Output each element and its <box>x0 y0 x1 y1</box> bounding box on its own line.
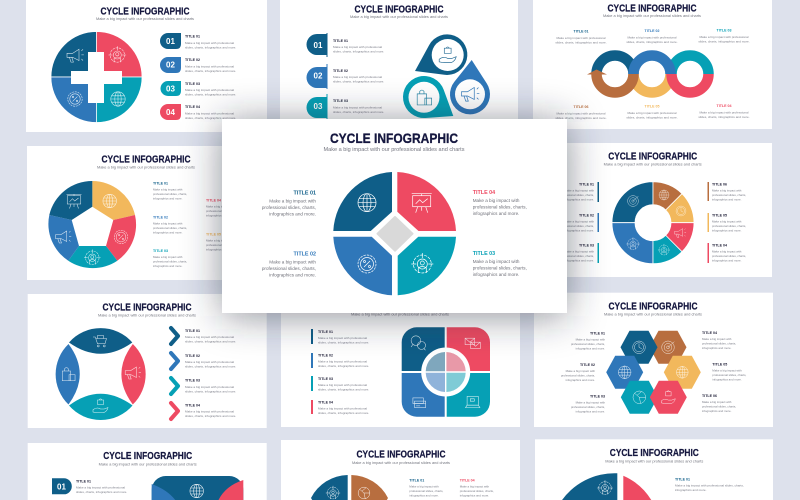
chart: pentagon ring <box>48 181 136 268</box>
list: square items: slides, charts, infographics and more. <box>318 388 369 392</box>
subtitle: bottom right: Make a big impact with our professional slides and charts <box>605 460 703 464</box>
list: plus cycle items: slides, charts, infographics and more. <box>185 92 236 96</box>
chart: interlinked rings <box>587 56 708 92</box>
list: hexagon right items: TITLE 05 <box>712 362 727 366</box>
list: plus cycle items: Make a big impact with professional <box>185 64 234 68</box>
subtitle: rounded square cycle: Make a big impact with our professional slides and charts <box>351 312 449 316</box>
list: donut left items: TITLE 02 <box>579 214 594 218</box>
list: plus cycle items: TITLE 02 <box>185 58 200 62</box>
list: pentagon items: Make a big impact with <box>206 238 236 242</box>
labels: rings top: TITLE 01 <box>574 30 588 34</box>
list item: title 01: TITLE 01 <box>675 478 690 482</box>
list: lens items with chevrons: TITLE 03 <box>185 378 200 382</box>
list: lens items with chevrons: slides, charts, infographics and more. <box>185 340 236 344</box>
list: lens items with chevrons: TITLE 01 <box>185 329 200 333</box>
panel: lens cycle slide <box>28 294 267 428</box>
chart: rounded petal shape <box>152 476 243 500</box>
list: teardrop items: 02 <box>314 72 323 80</box>
list: pentagon items: infographics and more. <box>206 248 236 252</box>
list: lens items with chevrons <box>171 328 236 419</box>
list: donut left items: professional slides, charts, <box>560 193 594 197</box>
list: plus cycle items: 02 <box>166 61 175 70</box>
list: hexagon right items: infographics and more. <box>712 378 742 382</box>
list: square items: TITLE 03 <box>318 377 333 381</box>
labels: rings top: Make a big impact with professional <box>627 36 677 40</box>
list item: title 01 <box>675 478 744 492</box>
list: pentagon items: infographics and more. <box>206 214 236 218</box>
icon: globe <box>358 194 376 212</box>
panel: rings cycle slide <box>533 0 772 129</box>
list: plus cycle items: 04 <box>166 108 175 117</box>
panel: bottom right slide <box>535 439 773 500</box>
list: donut left items: Make a big impact with <box>565 188 594 192</box>
list: donut left items: TITLE 01 <box>579 182 594 186</box>
list: pentagon items: professional slides, charts, <box>206 243 240 247</box>
heading: center: CYCLE INFOGRAPHIC <box>330 130 458 146</box>
text: title 01 <box>262 190 316 216</box>
list: hexagon right items: professional slides, charts, <box>712 373 747 377</box>
chart: hexagon ring <box>606 331 701 414</box>
subtitle: rings cycle: Make a big impact with our professional slides and charts <box>603 14 701 18</box>
list: hexagon right items: infographics and more. <box>702 409 732 413</box>
list: square items: slides, charts, infographics and more. <box>318 411 369 415</box>
list: lens items with chevrons: Make a big impact with professional <box>185 410 234 414</box>
heading: bottom middle: CYCLE INFOGRAPHIC <box>356 450 446 460</box>
labels: rings bottom: TITLE 05 <box>645 104 659 108</box>
list: lens items with chevrons: slides, charts, infographics and more. <box>185 390 236 394</box>
list: teardrop items: slides, charts, infographics and more. <box>333 50 384 54</box>
list item: title 01: Make a big impact with professional slides, charts, <box>675 484 744 488</box>
labels: rings top: TITLE 03 <box>717 28 731 32</box>
list: donut right items: infographics and more. <box>712 198 742 202</box>
labels: rings bottom: TITLE 04 <box>717 104 731 108</box>
list: bottom middle items: Make a big impact with <box>409 484 439 488</box>
subtitle: plus cycle: Make a big impact with our professional slides and charts <box>96 17 194 21</box>
chart: dark teardrop <box>415 34 467 75</box>
text: title 02: infographics and more. <box>269 272 316 278</box>
list: hexagon left items: TITLE 02 <box>580 363 595 367</box>
list: lens items with chevrons: TITLE 02 <box>185 354 200 358</box>
list: hexagon left items: infographics and more. <box>566 378 595 382</box>
list: donut right items: Make a big impact with <box>712 220 742 224</box>
list: pentagon items: infographics and more. <box>153 230 183 234</box>
chart: blue teardrop <box>450 60 490 114</box>
labels: rings bottom: slides, charts, infographics and more. <box>698 115 750 119</box>
list: square items: Make a big impact with professional <box>318 406 367 410</box>
list: square items: TITLE 04 <box>318 400 333 404</box>
labels: rings top: slides, charts, infographics and more. <box>698 40 750 44</box>
list: pentagon items: TITLE 02 <box>153 216 168 220</box>
center diamond <box>378 217 412 251</box>
list: hexagon left items: Make a big impact with <box>576 338 605 342</box>
list item: 01 <box>52 478 127 494</box>
heading: hexagon cycle: CYCLE INFOGRAPHIC <box>608 302 698 312</box>
list: donut right items: infographics and more. <box>712 258 742 262</box>
list: square items: TITLE 01 <box>318 330 333 334</box>
panel: donut cycle slide <box>533 143 772 277</box>
list: pentagon items: professional slides, charts, <box>206 209 240 213</box>
list: hexagon right items: TITLE 06 <box>702 394 717 398</box>
chart: plus cycle pie <box>51 32 142 122</box>
list: plus cycle items: slides, charts, infographics and more. <box>185 69 236 73</box>
list: teardrop items <box>306 33 384 119</box>
list: lens items with chevrons: Make a big impact with professional <box>185 335 234 339</box>
list: teardrop items: Make a big impact with professional <box>333 75 382 79</box>
text: title 03: professional slides, charts, <box>473 265 527 270</box>
list: plus cycle items: TITLE 04 <box>185 105 200 109</box>
panel: teardrop cycle slide <box>280 0 518 122</box>
labels: rings top: TITLE 02 <box>645 29 659 33</box>
list: plus cycle items: slides, charts, infographics and more. <box>185 46 236 50</box>
list item: 01: Make a big impact with professional <box>76 486 125 490</box>
labels: rings bottom: slides, charts, infographics and more. <box>555 116 607 120</box>
text: title 04: professional slides, charts, <box>473 204 527 209</box>
list: pentagon items: Make a big impact with <box>153 255 183 259</box>
list: pentagon items: professional slides, charts, <box>153 226 187 230</box>
list: square items: slides, charts, infographics and more. <box>318 364 369 368</box>
list: hexagon left items: professional slides, charts, <box>571 405 605 409</box>
list: teardrop items: 01 <box>314 41 323 50</box>
list: hexagon left items: TITLE 03 <box>590 394 605 398</box>
labels: rings bottom: TITLE 06 <box>574 105 588 109</box>
list: donut left items: infographics and more. <box>565 258 594 262</box>
list: hexagon right items <box>702 331 747 413</box>
heading: teardrop cycle: CYCLE INFOGRAPHIC <box>354 4 444 16</box>
chart: donut <box>612 182 694 264</box>
subtitle: bottom middle: Make a big impact with our professional slides and charts <box>352 461 450 465</box>
subtitle: teardrop cycle: Make a big impact with our professional slides and charts <box>350 15 448 19</box>
list: hexagon right items: Make a big impact with <box>702 400 732 404</box>
labels: rings bottom: Make a big impact with professional <box>556 112 606 116</box>
list: donut right items <box>708 182 746 263</box>
chart: four lenses <box>56 328 146 420</box>
icon: presentation board <box>412 194 432 213</box>
subtitle: center: Make a big impact with our professional slides and charts <box>324 147 465 153</box>
list: donut left items: Make a big impact with <box>565 220 594 224</box>
list: plus cycle items: slides, charts, infographics and more. <box>185 116 236 120</box>
list: pentagon items: TITLE 05 <box>206 232 221 236</box>
heading: bottom left: CYCLE INFOGRAPHIC <box>103 451 192 462</box>
panel: rounded square cycle slide <box>281 293 520 427</box>
list: plus cycle items: Make a big impact with professional <box>185 88 234 92</box>
list: donut left items: infographics and more. <box>565 228 594 232</box>
list: bottom middle items <box>409 478 494 498</box>
list: hexagon left items <box>561 332 605 414</box>
list: bottom middle items: professional slides, charts, <box>409 489 444 493</box>
text: title 04 <box>473 190 527 216</box>
list: bottom middle items: infographics and more. <box>460 494 489 498</box>
list: lens items with chevrons: TITLE 04 <box>185 404 200 408</box>
list: hexagon left items: Make a big impact with <box>566 369 595 373</box>
list: donut right items: infographics and more. <box>712 228 742 232</box>
list: donut left items: professional slides, charts, <box>560 254 594 258</box>
list: donut right items: professional slides, charts, <box>712 193 746 197</box>
chart: rounded square quadrants <box>402 327 490 417</box>
list: teardrop items: 03 <box>314 102 323 111</box>
icon: percent badge <box>358 255 376 273</box>
list: pentagon items: professional slides, charts, <box>153 192 187 196</box>
panel: center cycle slide <box>222 119 567 313</box>
labels: rings bottom: Make a big impact with professional <box>627 111 677 115</box>
list: hexagon left items: Make a big impact with <box>576 400 605 404</box>
subtitle: hexagon cycle: Make a big impact with our professional slides and charts <box>604 312 702 316</box>
list: pentagon items: Make a big impact with <box>153 222 183 226</box>
text: title 02 <box>262 252 316 278</box>
labels: rings top: Make a big impact with professional <box>556 36 606 40</box>
list: plus cycle items: TITLE 01 <box>185 34 200 38</box>
list: lens items with chevrons: slides, charts, infographics and more. <box>185 364 236 368</box>
list: donut left items: infographics and more. <box>565 198 594 202</box>
list: hexagon left items: TITLE 01 <box>590 332 605 336</box>
list item: 01: TITLE 01 <box>76 480 91 484</box>
list: plus cycle items <box>160 33 236 120</box>
list: donut right items: professional slides, charts, <box>712 254 746 258</box>
panel: hexagon cycle slide <box>534 293 773 427</box>
heading: lens cycle: CYCLE INFOGRAPHIC <box>102 302 192 314</box>
text: title 02: TITLE 02 <box>294 252 316 258</box>
subtitle: pentagon cycle: Make a big impact with our professional slides and charts <box>97 166 195 170</box>
list: teardrop items: slides, charts, infographics and more. <box>333 80 384 84</box>
list: square items: slides, charts, infographics and more. <box>318 340 369 344</box>
list: pentagon items: infographics and more. <box>153 264 183 268</box>
heading: plus cycle: CYCLE INFOGRAPHIC <box>100 6 190 18</box>
list: teardrop items: slides, charts, infographics and more. <box>333 110 384 114</box>
list: pentagon items: Make a big impact with <box>206 204 236 208</box>
list: square items: Make a big impact with professional <box>318 360 367 364</box>
list: donut right items: Make a big impact with <box>712 250 742 254</box>
list: pentagon items: infographics and more. <box>153 196 183 200</box>
subtitle: lens cycle: Make a big impact with our professional slides and charts <box>98 314 196 318</box>
list: plus cycle items: 03 <box>166 84 175 94</box>
list: lens items with chevrons: Make a big impact with professional <box>185 385 234 389</box>
list: hexagon right items: professional slides, charts, <box>702 342 736 346</box>
list: hexagon right items: TITLE 04 <box>702 331 717 335</box>
list: donut right items: TITLE 05 <box>712 214 727 218</box>
list: pentagon items: TITLE 03 <box>153 249 168 253</box>
list: pentagon items: professional slides, charts, <box>153 260 187 264</box>
list: donut left items: professional slides, charts, <box>560 224 594 228</box>
list: bottom middle items: Make a big impact with <box>460 484 489 488</box>
text: title 03: TITLE 03 <box>473 251 495 257</box>
list: hexagon right items: infographics and more. <box>702 346 732 350</box>
list: hexagon left items: infographics and more. <box>576 410 605 414</box>
list: lens items with chevrons: Make a big impact with professional <box>185 360 234 364</box>
chart: partial circle <box>560 473 653 500</box>
list: lens items with chevrons: slides, charts, infographics and more. <box>185 414 236 418</box>
panel: plus cycle slide <box>26 0 267 132</box>
list: donut right items: Make a big impact with <box>712 188 742 192</box>
text: title 03 <box>473 251 527 277</box>
list: teardrop items: Make a big impact with professional <box>333 45 382 49</box>
text: title 04: infographics and more. <box>473 211 519 216</box>
list: pentagon items: TITLE 01 <box>153 182 168 186</box>
list: bottom middle items: infographics and more. <box>409 494 439 498</box>
labels: rings top: Make a big impact with professional <box>699 35 749 39</box>
list: square items: Make a big impact with professional <box>318 336 367 340</box>
list: square items <box>311 329 369 415</box>
text: title 03: infographics and more. <box>473 272 519 277</box>
panel: bottom left slide <box>28 443 267 500</box>
chart: partial pie <box>311 475 388 500</box>
list: teardrop items: TITLE 02 <box>333 69 348 73</box>
list item: 01: slides, charts, infographics and more. <box>76 490 127 494</box>
list: teardrop items: TITLE 01 <box>333 39 348 43</box>
list: plus cycle items: Make a big impact with professional <box>185 112 234 116</box>
list item: title 01: infographics and more. <box>675 488 707 492</box>
text: title 01: professional slides, charts, <box>262 205 316 210</box>
list: plus cycle items: TITLE 03 <box>185 82 200 86</box>
shadow behind center slide <box>222 122 567 316</box>
labels: rings bottom: Make a big impact with professional <box>699 110 749 114</box>
list: pentagon items: TITLE 04 <box>206 198 221 202</box>
labels: rings top: slides, charts, infographics and more. <box>626 40 678 44</box>
chart: center four segment pie <box>333 172 456 295</box>
list: donut left items: TITLE 03 <box>579 244 594 248</box>
icon: target person <box>411 253 433 273</box>
list: donut right items: professional slides, charts, <box>712 224 746 228</box>
labels: rings top: slides, charts, infographics and more. <box>555 40 607 44</box>
list: teardrop items: Make a big impact with professional <box>333 106 382 110</box>
list: donut right items: TITLE 06 <box>712 182 727 186</box>
text: title 02: professional slides, charts, <box>262 266 316 271</box>
list: plus cycle items: 01 <box>166 37 175 46</box>
subtitle: donut cycle: Make a big impact with our professional slides and charts <box>604 162 702 166</box>
list: bottom middle items: TITLE 01 <box>409 478 424 482</box>
list item: 01: 01 <box>57 482 66 492</box>
labels: rings bottom <box>555 104 750 120</box>
text: title 01: infographics and more. <box>269 212 316 216</box>
list: hexagon right items: professional slides, charts, <box>702 404 736 408</box>
panel: pentagon cycle slide <box>27 146 267 280</box>
list: hexagon left items: professional slides, charts, <box>561 374 595 378</box>
text: title 01: Make a big impact with <box>269 198 316 204</box>
list: donut left items: Make a big impact with <box>565 250 594 254</box>
list: pentagon items <box>153 182 240 268</box>
text: title 04: TITLE 04 <box>473 190 495 196</box>
list: donut right items: TITLE 04 <box>712 244 727 248</box>
text: title 02: Make a big impact with <box>269 260 316 264</box>
heading: donut cycle: CYCLE INFOGRAPHIC <box>608 152 697 162</box>
list: donut left items <box>560 182 599 263</box>
list: plus cycle items: Make a big impact with professional <box>185 41 234 45</box>
list: bottom middle items: professional slides, charts, <box>460 489 494 493</box>
heading: rings cycle: CYCLE INFOGRAPHIC <box>608 4 696 14</box>
subtitle: bottom left: Make a big impact with our professional slides and charts <box>99 462 197 466</box>
text: title 01: TITLE 01 <box>294 190 316 196</box>
list: bottom middle items: TITLE 04 <box>460 478 475 482</box>
list: pentagon items: Make a big impact with <box>153 188 183 192</box>
panel: bottom middle slide <box>281 440 520 500</box>
text: title 03: Make a big impact with <box>473 259 520 264</box>
heading: bottom right: CYCLE INFOGRAPHIC <box>610 448 699 459</box>
text: title 04: Make a big impact with <box>473 198 520 203</box>
labels: rings top <box>555 28 750 44</box>
chart: teal teardrop <box>403 76 453 118</box>
list: teardrop items: TITLE 03 <box>333 99 348 103</box>
heading: pentagon cycle: CYCLE INFOGRAPHIC <box>102 154 190 166</box>
list: hexagon right items: Make a big impact with <box>702 337 732 341</box>
list: hexagon left items: professional slides, charts, <box>571 342 605 346</box>
list: square items: TITLE 02 <box>318 354 333 358</box>
list: square items: Make a big impact with professional <box>318 383 367 387</box>
list: hexagon left items: infographics and more. <box>576 346 605 350</box>
labels: rings bottom: slides, charts, infographics and more. <box>626 116 678 120</box>
list: hexagon right items: Make a big impact with <box>712 368 742 372</box>
